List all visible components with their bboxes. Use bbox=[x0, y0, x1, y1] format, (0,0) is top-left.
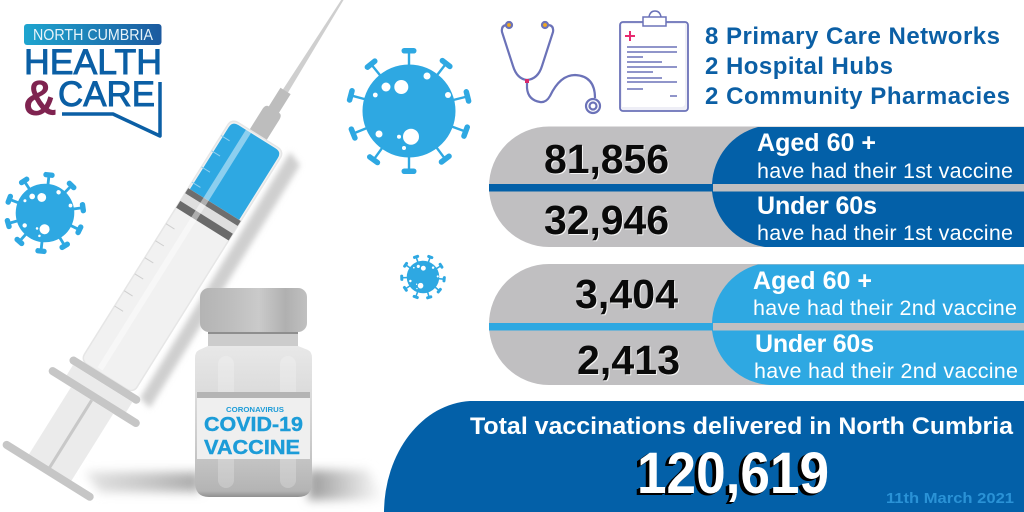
label: aged 60+ first: Aged 60 + bbox=[757, 129, 876, 157]
label: under 60 second: have had their 2nd vaccine bbox=[754, 359, 1018, 383]
panel: second vaccine bbox=[489, 264, 1024, 385]
label: aged 60+ second: Aged 60 + bbox=[753, 267, 872, 295]
vial body bbox=[195, 346, 312, 497]
label: aged 60+ second bbox=[753, 267, 1017, 320]
text block: sites list: 2 Hospital Hubs bbox=[705, 53, 893, 80]
needle bbox=[282, 0, 345, 94]
vial neck bbox=[208, 332, 298, 346]
number: total: 120,619 bbox=[637, 441, 829, 506]
vial label: CORONAVIRUS bbox=[226, 405, 284, 414]
label: aged 60+ second: have had their 2nd vaccine bbox=[753, 296, 1017, 320]
label: under 60 first: have had their 1st vaccine bbox=[757, 221, 1013, 245]
icon: large virus bbox=[346, 48, 472, 174]
logo: North Cumbria Health & Care: CARE bbox=[58, 75, 155, 114]
icon: stethoscope bbox=[502, 22, 600, 113]
label: under 60 first: Under 60s bbox=[757, 192, 877, 220]
label: under 60 second bbox=[754, 330, 1018, 383]
number: aged 60+ first: 81,856 bbox=[544, 136, 669, 182]
icon: clipboard bbox=[620, 11, 688, 111]
logo: North Cumbria Health & Care bbox=[23, 24, 162, 136]
logo: North Cumbria Health & Care: & bbox=[23, 70, 57, 126]
number: under 60 first: 32,946 bbox=[544, 197, 669, 243]
icon: left virus bbox=[0, 168, 90, 258]
syringe flange bbox=[47, 349, 152, 429]
logo: North Cumbria Health & Care: NORTH CUMBRIA bbox=[33, 27, 154, 44]
text block: sites list: 8 Primary Care Networks bbox=[705, 23, 1000, 50]
illustration: vaccine vial bbox=[195, 288, 312, 497]
label: aged 60+ first bbox=[757, 129, 1013, 183]
label: under 60 first bbox=[757, 192, 1013, 245]
label: aged 60+ first: have had their 1st vaccine bbox=[757, 159, 1013, 183]
illustration: ground and syringe shadows bbox=[85, 152, 385, 500]
icon: small virus bbox=[394, 248, 452, 306]
panel: total vaccinations bbox=[384, 401, 1024, 512]
number: under 60 second: 2,413 bbox=[577, 337, 680, 383]
illustration: syringe bbox=[1, 0, 388, 502]
date: 11th March 2021 bbox=[886, 490, 1014, 507]
vial label: COVID-19 bbox=[204, 414, 303, 436]
syringe plunger bbox=[1, 372, 137, 502]
vial label: VACCINE bbox=[204, 437, 300, 459]
vial label bbox=[197, 398, 310, 459]
label: under 60 second: Under 60s bbox=[755, 330, 874, 358]
heading: total vaccinations: Total vaccinations delivered in North Cumbria bbox=[470, 413, 1014, 440]
logo: North Cumbria Health & Care: HEALTH bbox=[24, 43, 162, 82]
text block: sites list: 2 Community Pharmacies bbox=[705, 83, 1010, 110]
vial cap bbox=[200, 288, 307, 332]
number: aged 60+ second: 3,404 bbox=[575, 271, 678, 317]
panel: first vaccine bbox=[489, 126, 1024, 247]
syringe barrel bbox=[81, 119, 284, 393]
needle hub bbox=[248, 86, 294, 142]
text block: sites list bbox=[705, 23, 1010, 110]
